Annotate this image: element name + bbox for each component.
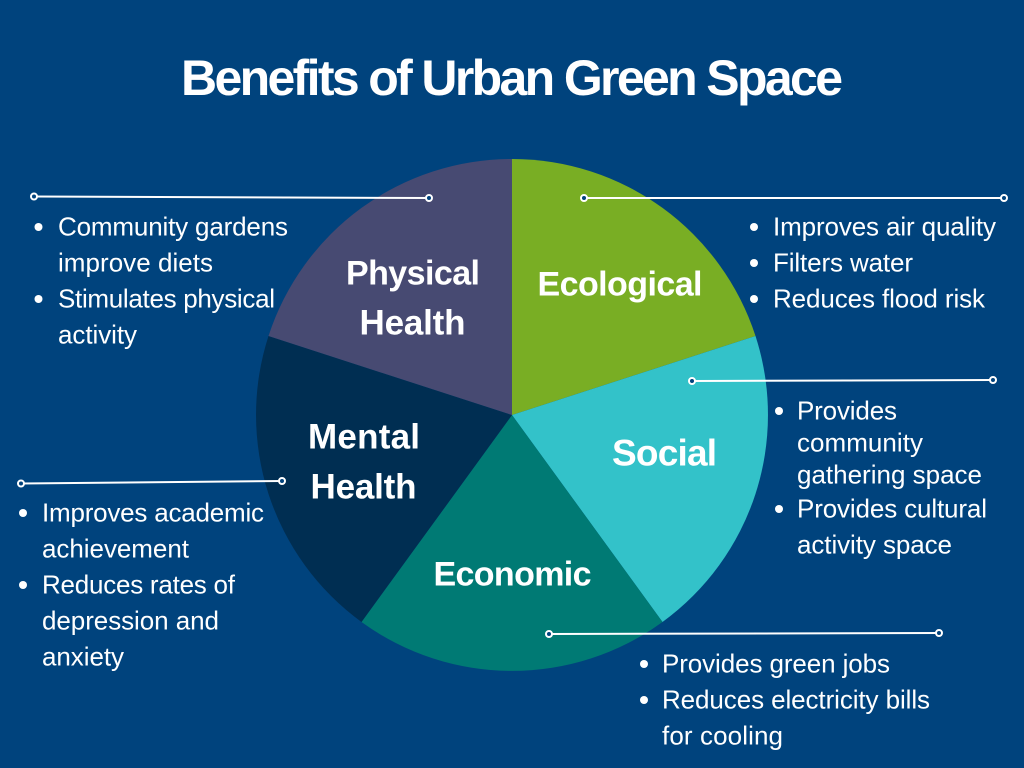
label: ecological: Ecological [538, 266, 702, 304]
label: economic: Economic [434, 556, 592, 594]
leader line [692, 380, 993, 381]
callout: physical health [31, 194, 432, 350]
text: Improves air quality [773, 212, 996, 242]
callout: social: community [797, 428, 923, 458]
callout: physical health: Stimulates physical [58, 284, 275, 314]
bullets [775, 407, 783, 415]
leader line [21, 481, 282, 484]
callout: social: gathering space [797, 460, 982, 490]
callout: physical health: activity [58, 320, 137, 350]
leader line [584, 197, 1004, 199]
pie chart [256, 159, 768, 671]
bullets [19, 509, 27, 517]
callout: economic: Reduces electricity bills [662, 685, 930, 715]
label: mental health: Mental [308, 418, 420, 457]
bullets [640, 660, 648, 668]
slice: ecological [512, 159, 756, 415]
label: social: Social [612, 433, 717, 474]
label: mental health second line: Health [310, 468, 416, 507]
bullets [34, 223, 42, 231]
text: Community gardens [58, 212, 288, 242]
callout: mental health: Reduces rates of [42, 570, 236, 600]
leader line [34, 196, 429, 198]
callout: ecological: Filters water [773, 248, 913, 278]
callout: social: Provides cultural [797, 494, 987, 524]
callout: mental health: achievement [42, 534, 190, 564]
slice: social [512, 336, 768, 622]
callout: mental health: depression and [42, 606, 219, 636]
callout: social: activity space [797, 530, 952, 560]
text: Improves academic [42, 498, 264, 528]
callout: social [689, 377, 996, 560]
callout: mental health: anxiety [42, 642, 124, 672]
bullets [750, 223, 758, 231]
callout: mental health [18, 478, 285, 672]
callout: economic: for cooling [662, 721, 783, 751]
title: Benefits of Urban Green Space [181, 50, 843, 106]
slice: mental health [256, 336, 512, 622]
callout: ecological [581, 195, 1007, 314]
slice: economic [362, 415, 662, 671]
leader line [549, 633, 939, 634]
slice: physical health [268, 159, 512, 415]
label: physical health second line: Health [360, 304, 466, 343]
text: Provides green jobs [662, 649, 890, 679]
callout: economic [546, 630, 942, 751]
text: Provides [797, 396, 897, 426]
label: physical health: Physical [346, 255, 480, 293]
callout: physical health: improve diets [58, 248, 213, 278]
callout: ecological: Reduces flood risk [773, 284, 986, 314]
